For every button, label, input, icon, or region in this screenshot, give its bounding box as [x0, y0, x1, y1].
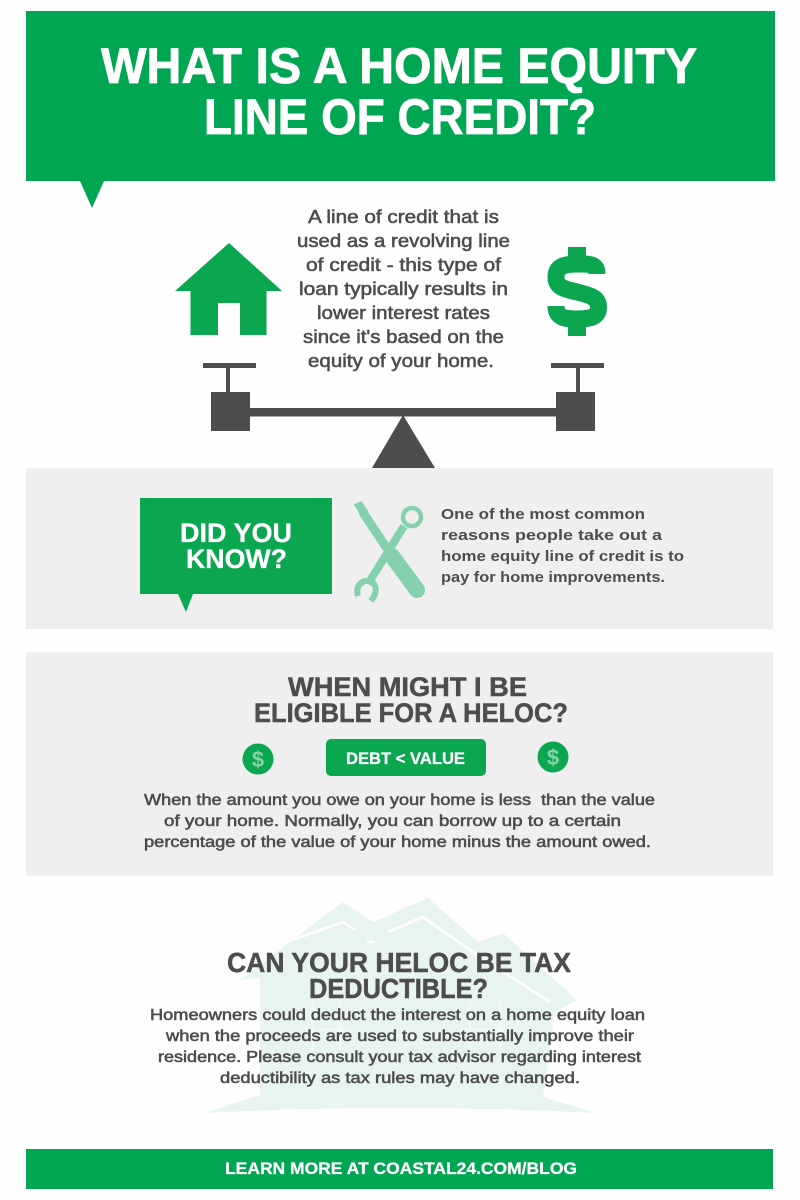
- icon: left coin: [242, 744, 274, 774]
- debt less than value button: DEBT < VALUE: [346, 749, 465, 768]
- did you know callout: DID YOU: [180, 518, 292, 548]
- eligibility text: percentage of the value of your home minus the amount owed.: [144, 834, 651, 851]
- icon: dollar sign: [556, 247, 598, 336]
- definition text block: of credit - this type of: [306, 255, 502, 275]
- eligibility text: When the amount you owe on your home is less than the value: [144, 792, 655, 809]
- definition text block: [297, 207, 510, 371]
- eligibility text: [144, 792, 655, 851]
- did you know text: pay for home improvements.: [441, 569, 665, 586]
- header banner: [26, 11, 775, 208]
- eligibility heading: [254, 672, 568, 728]
- tax heading: DEDUCTIBLE?: [309, 973, 488, 1004]
- title: [101, 38, 697, 145]
- icon: right coin: $: [547, 745, 559, 770]
- watermark house illustration: [203, 898, 597, 1113]
- panel: did you know: [26, 468, 773, 629]
- eligibility heading: WHEN MIGHT I BE: [288, 672, 527, 702]
- icon: crossed tools: [356, 503, 421, 601]
- tax text: deductibility as tax rules may have changed.: [220, 1070, 580, 1087]
- definition text block: equity of your home.: [308, 351, 494, 371]
- did you know text: reasons people take out a: [441, 527, 663, 544]
- did you know text: One of the most common: [441, 506, 645, 523]
- title: LINE OF CREDIT?: [204, 89, 596, 145]
- footer bar: [26, 1149, 773, 1189]
- definition text block: lower interest rates: [317, 303, 490, 323]
- definition text block: A line of credit that is: [308, 207, 499, 227]
- did you know callout: KNOW?: [186, 544, 287, 574]
- tax heading: CAN YOUR HELOC BE TAX: [227, 947, 572, 978]
- footer bar: LEARN MORE AT COASTAL24.COM/BLOG: [225, 1159, 577, 1178]
- debt less than value button: [326, 739, 486, 776]
- panel: eligibility: [26, 652, 773, 876]
- icon: left coin: $: [252, 747, 264, 772]
- did you know text: [441, 506, 684, 586]
- tax text: residence. Please consult your tax advisor regarding interest: [158, 1049, 642, 1066]
- eligibility heading: ELIGIBLE FOR A HELOC?: [254, 698, 568, 728]
- title: WHAT IS A HOME EQUITY: [101, 38, 697, 94]
- definition text block: since it's based on the: [303, 327, 504, 347]
- icon: house: [175, 243, 282, 335]
- tax text: Homeowners could deduct the interest on a home equity loan: [150, 1007, 645, 1024]
- tax text: when the proceeds are used to substantially improve their: [165, 1028, 634, 1045]
- did you know text: home equity line of credit is to: [441, 548, 684, 565]
- definition text block: loan typically results in: [299, 279, 508, 299]
- tax text: [150, 1007, 645, 1087]
- balance scale: [203, 363, 604, 468]
- eligibility text: of your home. Normally, you can borrow up to a certain: [164, 813, 621, 830]
- definition text block: used as a revolving line: [297, 231, 510, 251]
- did you know callout: [140, 498, 332, 612]
- icon: right coin: [538, 742, 568, 772]
- tax heading: [227, 947, 572, 1004]
